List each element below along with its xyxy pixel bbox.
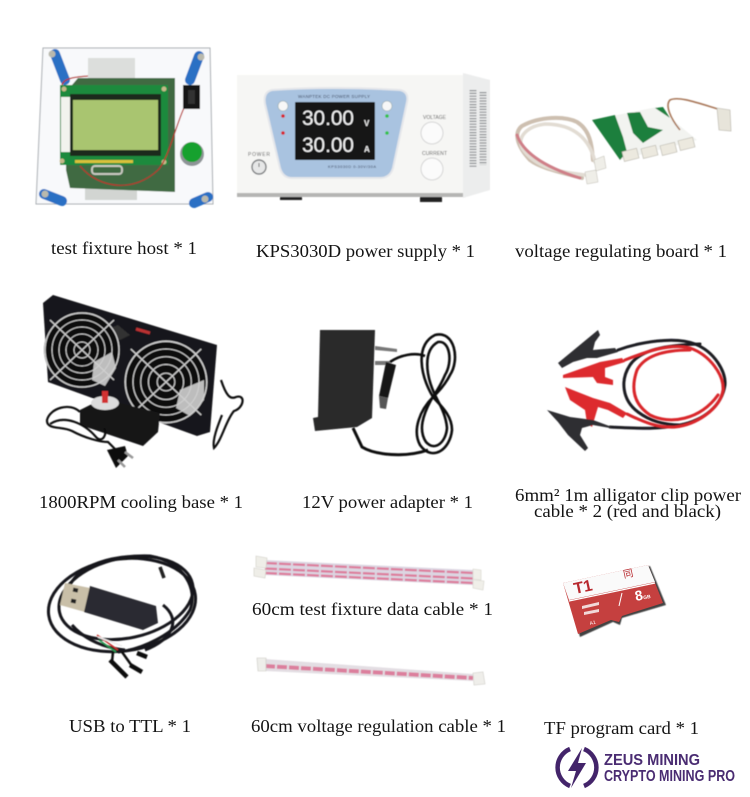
label: 1800RPM cooling base: 1800RPM cooling base * 1: [39, 492, 243, 512]
product: KPS3030D power supply: WANPTEK DC POWER SUPPLY: [298, 94, 370, 99]
product: test fixture host: [36, 48, 213, 204]
product: TF program card: [563, 564, 666, 637]
product: KPS3030D power supply: V: [364, 119, 370, 128]
product: 12V power adapter: [313, 330, 455, 455]
product: 60cm voltage regulation cable: [257, 658, 485, 685]
product: TF program card: A1: [589, 620, 597, 627]
product: KPS3030D power supply: 30.00: [302, 134, 354, 157]
label: alligator clip power cable: cable * 2 (red and black): [534, 501, 721, 522]
product: KPS3030D power supply: VOLTAGE: [423, 115, 447, 121]
product: TF program card: 同: [622, 564, 634, 581]
product: KPS3030D power supply: CURRENT: [422, 151, 447, 157]
product: KPS3030D power supply: A: [364, 145, 370, 154]
product: KPS3030D power supply: KPS3030D 0-30V/30A: [328, 164, 376, 169]
product: 1800RPM cooling base: [43, 295, 243, 468]
product: 60cm test fixture data cable: [254, 556, 484, 590]
label: 60cm voltage regulation cable: 60cm voltage regulation cable * 1: [251, 716, 506, 736]
product: alligator clip power cables: [547, 330, 725, 451]
product: USB to TTL cable: [42, 545, 202, 677]
product: KPS3030D power supply: [237, 73, 490, 202]
logo: Zeus Mining Crypto Mining Pro: ZEUS MINING: [604, 752, 700, 769]
label: USB to TTL: USB to TTL * 1: [69, 716, 191, 736]
product: KPS3030D power supply: 30.00: [302, 107, 354, 130]
product: TF program card: 8GB: [633, 585, 652, 604]
label: test fixture host: test fixture host * 1: [51, 238, 197, 258]
label: 12V power adapter: 12V power adapter * 1: [302, 492, 473, 512]
logo: Zeus Mining Crypto Mining Pro: [558, 748, 735, 788]
label: voltage regulating board: voltage regulating board * 1: [515, 241, 727, 261]
label: KPS3030D power supply: KPS3030D power supply * 1: [256, 241, 475, 261]
product: KPS3030D power supply: POWER: [248, 152, 270, 158]
label: 60cm test fixture data cable: 60cm test fixture data cable * 1: [252, 599, 493, 619]
label: alligator clip power cable: [515, 485, 741, 522]
label: alligator clip power cable: 6mm² 1m alligator clip power: [515, 485, 741, 505]
label: TF program card: TF program card * 1: [544, 718, 699, 738]
product: voltage regulating board and wires: [517, 99, 731, 184]
product: TF program card: T1: [572, 577, 594, 598]
